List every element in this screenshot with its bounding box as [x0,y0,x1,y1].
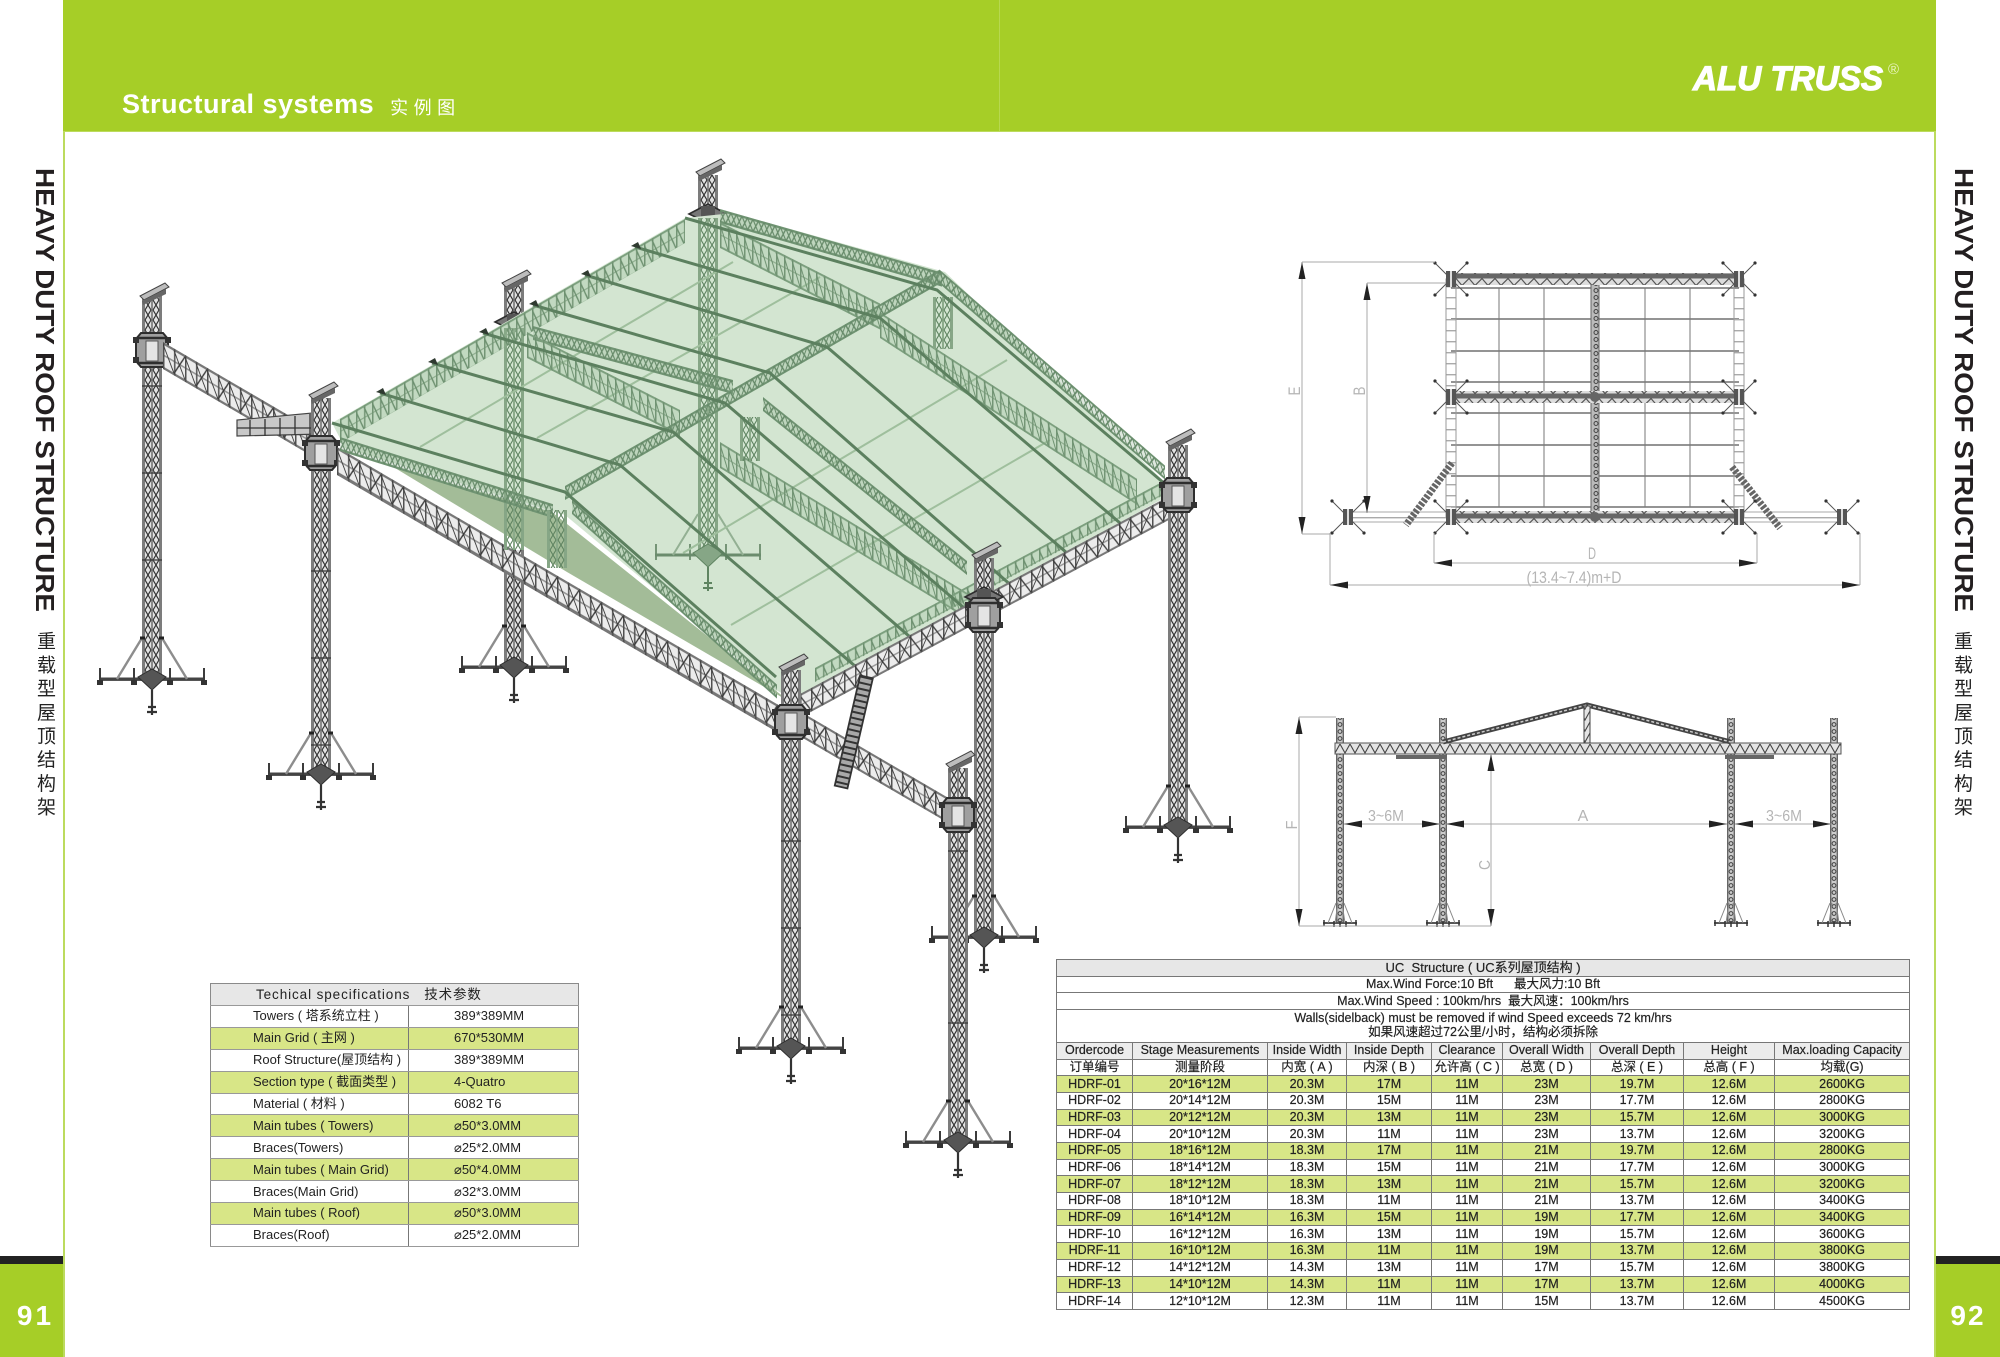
UC structure table: 总高 ( F ) [1703,1060,1755,1074]
technical specifications table: Section type ( 截面类型 ) [253,1074,396,1089]
elevation labels: 3~6M [1766,808,1802,825]
side title cn right: 重载型屋顶结构架 [1951,631,1972,821]
tower 7 front corner [736,654,846,1084]
right page border [1934,131,1936,1357]
technical specifications table: Braces(Towers) [253,1140,343,1155]
technical specifications table: ⌀50*4.0MM [454,1162,521,1177]
UC structure table: 20*12*12M [1169,1110,1231,1124]
technical specifications table: Main tubes ( Roof) [253,1205,360,1220]
UC structure table: 2800KG [1819,1093,1865,1107]
UC structure table: 17.7M [1620,1210,1654,1224]
UC structure table [1056,959,1910,1310]
UC structure table: 11M [1455,1210,1479,1224]
UC structure table: 12.3M [1290,1294,1324,1308]
UC structure table: 11M [1455,1294,1479,1308]
page tab 91 [0,1256,63,1357]
UC structure table: 11M [1455,1227,1479,1241]
technical specifications table: ⌀25*2.0MM [454,1140,521,1155]
tower 5 back right [1123,429,1233,863]
UC structure table: 15.7M [1620,1260,1654,1274]
UC structure table: 如果风速超过72公里/小时，结构必须拆除 [1368,1025,1598,1039]
dimension labels: B [1350,386,1369,396]
UC structure table: 18.3M [1290,1143,1324,1157]
page tab 91: 91 [17,1300,54,1331]
technical specifications table: 4-Quatro [454,1074,505,1089]
UC structure table: 2600KG [1819,1077,1865,1091]
main beam left to front [337,447,797,744]
UC structure table: 12.6M [1712,1210,1746,1224]
UC structure table: 18*10*12M [1169,1193,1231,1207]
UC structure table: 18*12*12M [1169,1177,1231,1191]
UC structure table: 11M [1455,1193,1479,1207]
UC structure table: 11M [1455,1177,1479,1191]
UC structure table: 11M [1377,1193,1401,1207]
UC structure table: 16*12*12M [1169,1227,1231,1241]
elevation main truss [1335,743,1841,759]
UC structure table: 15.7M [1620,1227,1654,1241]
UC structure table: HDRF-02 [1068,1093,1121,1107]
technical specifications table: Towers ( 塔系统立柱 ) [253,1008,379,1023]
left page border [63,131,65,1357]
UC structure table: 12.6M [1712,1277,1746,1291]
UC structure table: 23M [1534,1127,1559,1141]
UC structure table: 11M [1455,1260,1479,1274]
UC structure table: Clearance [1438,1043,1495,1057]
UC structure table: 20.3M [1290,1110,1324,1124]
UC structure table: 21M [1534,1177,1559,1191]
UC structure table: 内深 ( B ) [1363,1060,1415,1074]
UC structure table: 23M [1534,1077,1559,1091]
top plan drawing [1285,261,1860,588]
UC structure table: HDRF-06 [1068,1160,1121,1174]
technical specifications table: 670*530MM [454,1030,524,1045]
UC structure table: 13M [1377,1110,1401,1124]
green tower 4 through roof [655,218,761,591]
UC structure table: 12.6M [1712,1160,1746,1174]
UC structure table: 19.7M [1620,1143,1654,1157]
purlin end caps [376,242,641,395]
UC structure table: 11M [1377,1294,1401,1308]
main isometric roof illustration [97,158,1233,1178]
UC structure table: 12.6M [1712,1243,1746,1257]
UC structure table: 15M [1377,1210,1401,1224]
technical specifications table: Material ( 材料 ) [253,1096,345,1111]
roof membrane [332,213,1175,703]
UC structure table: 12.6M [1712,1093,1746,1107]
page tab 92 [1936,1256,2000,1357]
technical specifications table [210,983,579,1247]
UC structure table: 15.7M [1620,1110,1654,1124]
UC structure table: Stage Measurements [1141,1043,1259,1057]
UC structure table: 12.6M [1712,1177,1746,1191]
UC structure table: 14.3M [1290,1277,1324,1291]
UC structure table: 18.3M [1290,1160,1324,1174]
UC structure table: 13.7M [1620,1294,1654,1308]
UC structure table: 允许高 ( C ) [1434,1060,1500,1074]
UC structure table: 16*10*12M [1169,1243,1231,1257]
UC structure table: 20*14*12M [1169,1093,1231,1107]
UC structure table: HDRF-03 [1068,1110,1121,1124]
UC structure table: 3000KG [1819,1160,1865,1174]
UC structure table: UC Structure ( UC系列屋顶结构 ) [1386,960,1581,975]
elevation labels: F [1284,820,1301,830]
UC structure table: 19M [1534,1227,1559,1241]
elevation labels [1284,808,1802,870]
tower 2 with side truss [163,342,376,810]
extension beam to tower 8 [803,713,953,826]
UC structure table: 17M [1377,1077,1401,1091]
UC structure table: 18*14*12M [1169,1160,1231,1174]
UC structure table: HDRF-13 [1068,1277,1121,1291]
UC structure table: 17.7M [1620,1160,1654,1174]
elevation labels: 3~6M [1368,808,1404,825]
technical specifications table: ⌀32*3.0MM [454,1184,521,1199]
UC structure table: 11M [1455,1127,1479,1141]
UC structure table: 3200KG [1819,1127,1865,1141]
elevation arrows [1296,717,1831,926]
UC structure table: Overall Width [1509,1043,1584,1057]
UC structure table: HDRF-01 [1068,1077,1121,1091]
anchors [1330,261,1860,535]
UC structure table: Overall Depth [1599,1043,1675,1057]
UC structure table: HDRF-09 [1068,1210,1121,1224]
UC structure table: Max.loading Capacity [1782,1043,1902,1057]
technical specifications table: Main tubes ( Towers) [253,1118,373,1133]
technical specifications table: ⌀50*3.0MM [454,1205,521,1220]
UC structure table: 3400KG [1819,1193,1865,1207]
logo: ALU TRUSS: ® [1888,61,1899,78]
UC structure table: HDRF-07 [1068,1177,1121,1191]
UC structure table: 13.7M [1620,1277,1654,1291]
dimension labels: D [1588,544,1596,563]
technical specifications table: Main tubes ( Main Grid) [253,1162,389,1177]
UC structure table: 18*16*12M [1169,1143,1231,1157]
UC structure table: Walls(sidelback) must be removed if wind Speed exceeds 72 km/hrs [1294,1011,1672,1025]
UC structure table: Inside Width [1273,1043,1341,1057]
UC structure table: Ordercode [1065,1043,1124,1057]
UC structure table: 均载(G) [1821,1060,1864,1074]
UC structure table: 17M [1534,1277,1559,1291]
UC structure table: 19M [1534,1210,1559,1224]
technical specifications table: 389*389MM [454,1052,524,1067]
UC structure table: 11M [1455,1160,1479,1174]
UC structure table: 总宽 ( D ) [1520,1060,1573,1074]
UC structure table: 18.3M [1290,1177,1324,1191]
UC structure table: 15M [1377,1160,1401,1174]
UC structure table: 13.7M [1620,1243,1654,1257]
technical specifications table: ⌀50*3.0MM [454,1118,521,1133]
page tab 92: 92 [1950,1300,1986,1331]
dimension lines [1302,262,1860,585]
UC structure table: 16*14*12M [1169,1210,1231,1224]
UC structure table: 15.7M [1620,1177,1654,1191]
dimension labels: E [1285,386,1304,396]
UC structure table: Height [1711,1043,1747,1057]
elevation dimension lines [1299,717,1831,926]
UC structure table: 20.3M [1290,1093,1324,1107]
UC structure table: 13.7M [1620,1193,1654,1207]
technical specifications table: Braces(Main Grid) [253,1184,358,1199]
UC structure table: 17.7M [1620,1093,1654,1107]
UC structure table: 12.6M [1712,1077,1746,1091]
UC structure table: 11M [1455,1077,1479,1091]
side title left: HEAVY DUTY ROOF STRUCTURE [30,168,60,612]
diagonal ladder brace [835,675,873,788]
tower 3 upper and lower parts [459,270,569,703]
UC structure table: Max.Wind Speed : 100km/hrs 最大风速：100km/hrs [1337,994,1629,1008]
UC structure table: 23M [1534,1093,1559,1107]
UC structure table: 4500KG [1819,1294,1865,1308]
UC structure table: HDRF-08 [1068,1193,1121,1207]
elevation labels: A [1578,808,1589,825]
tower 6 front right [929,542,1039,973]
roof trusses [340,209,1165,699]
logo: ALU TRUSS: ALU TRUSS [1692,60,1883,98]
tower 1 far left [97,283,207,715]
UC structure table: 23M [1534,1110,1559,1124]
UC structure table: 14*12*12M [1169,1260,1231,1274]
UC structure table: HDRF-14 [1068,1294,1121,1308]
UC structure table: Max.Wind Force:10 Bft 最大风力:10 Bft [1366,977,1600,991]
UC structure table: 3800KG [1819,1243,1865,1257]
technical specifications table: 6082 T6 [454,1096,501,1111]
UC structure table: 13.7M [1620,1127,1654,1141]
UC structure table: 2800KG [1819,1143,1865,1157]
UC structure table: 19.7M [1620,1077,1654,1091]
UC structure table: 20.3M [1290,1127,1324,1141]
UC structure table: 12.6M [1712,1294,1746,1308]
front beam [800,495,1172,718]
UC structure table: 15M [1534,1294,1559,1308]
technical specifications table: Main Grid ( 主网 ) [253,1030,355,1045]
UC structure table: 16.3M [1290,1243,1324,1257]
dimension labels [1285,386,1622,587]
UC structure table: 12.6M [1712,1127,1746,1141]
UC structure table: 16.3M [1290,1210,1324,1224]
green tower 3 through roof [504,328,524,550]
tower 8 far front [903,751,1013,1178]
UC structure table: 11M [1455,1110,1479,1124]
UC structure table: 19M [1534,1243,1559,1257]
tower 4 upper part [689,159,727,223]
UC structure table: 订单编号 [1069,1060,1120,1074]
dimension labels: (13.4~7.4)m+D [1526,568,1622,587]
UC structure table: 17M [1534,1260,1559,1274]
UC structure table: 14.3M [1290,1260,1324,1274]
UC structure table: 15M [1377,1093,1401,1107]
UC structure table: 18.3M [1290,1193,1324,1207]
roof cross lines [420,262,1050,625]
UC structure table: 12.6M [1712,1193,1746,1207]
UC structure table: 内宽 ( A ) [1281,1060,1333,1074]
UC structure table: 11M [1455,1093,1479,1107]
UC structure table: 16.3M [1290,1227,1324,1241]
UC structure table: 21M [1534,1143,1559,1157]
UC structure table: 12*10*12M [1169,1294,1231,1308]
UC structure table: HDRF-04 [1068,1127,1121,1141]
UC structure table: 3800KG [1819,1260,1865,1274]
header band [63,0,1936,132]
elevation towers [1323,718,1851,927]
UC structure table: HDRF-12 [1068,1260,1121,1274]
dimension arrows [1298,262,1860,588]
UC structure table: 13M [1377,1260,1401,1274]
UC structure table: 21M [1534,1160,1559,1174]
side columns [1446,279,1744,517]
UC structure table: 12.6M [1712,1260,1746,1274]
UC structure table: 11M [1455,1277,1479,1291]
UC structure table: 11M [1377,1277,1401,1291]
UC structure table: 12.6M [1712,1227,1746,1241]
elevation labels: C [1477,860,1494,870]
UC structure table: HDRF-10 [1068,1227,1121,1241]
UC structure table: HDRF-05 [1068,1143,1121,1157]
UC structure table: 测量阶段 [1175,1060,1225,1074]
UC structure table: 11M [1377,1127,1401,1141]
technical specifications table: Braces(Roof) [253,1227,330,1242]
UC structure table: 11M [1377,1243,1401,1257]
technical specifications table: Techical specifications 技术参数 [256,986,482,1002]
UC structure table: 14*10*12M [1169,1277,1231,1291]
UC structure table: 3600KG [1819,1227,1865,1241]
braces [1406,463,1780,528]
technical specifications table: 389*389MM [454,1008,524,1023]
rear wall panel [395,468,790,702]
UC structure table: 12.6M [1712,1110,1746,1124]
roof purlins [332,218,1172,677]
grid lines [1451,288,1739,507]
UC structure table: 12.6M [1712,1143,1746,1157]
UC structure table: 20.3M [1290,1077,1324,1091]
UC structure table: 11M [1455,1243,1479,1257]
UC structure table: 13M [1377,1227,1401,1241]
UC structure table: 3400KG [1819,1210,1865,1224]
UC structure table: 4000KG [1819,1277,1865,1291]
UC structure table: 21M [1534,1193,1559,1207]
UC structure table: 3200KG [1819,1177,1865,1191]
UC structure table: 总深 ( E ) [1611,1060,1663,1074]
horizontal trusses [1348,273,1842,523]
UC structure table: 20*10*12M [1169,1127,1231,1141]
technical specifications table: ⌀25*2.0MM [454,1227,521,1242]
UC structure table: Inside Depth [1354,1043,1424,1057]
UC structure table: 11M [1455,1143,1479,1157]
UC structure table: 3000KG [1819,1110,1865,1124]
side title cn left: 重载型屋顶结构架 [34,631,55,821]
technical specifications table: Roof Structure(屋顶结构 ) [253,1052,401,1067]
UC structure table: 20*16*12M [1169,1077,1231,1091]
UC structure table: HDRF-11 [1069,1243,1120,1257]
UC structure table: 13M [1377,1177,1401,1191]
side elevation drawing [1284,702,1851,927]
UC structure table: 17M [1377,1143,1401,1157]
elevation roof [1443,705,1731,743]
side title right: HEAVY DUTY ROOF STRUCTURE [1949,168,1979,612]
heading: structural systems: Structural systems 实例图 [122,89,461,119]
